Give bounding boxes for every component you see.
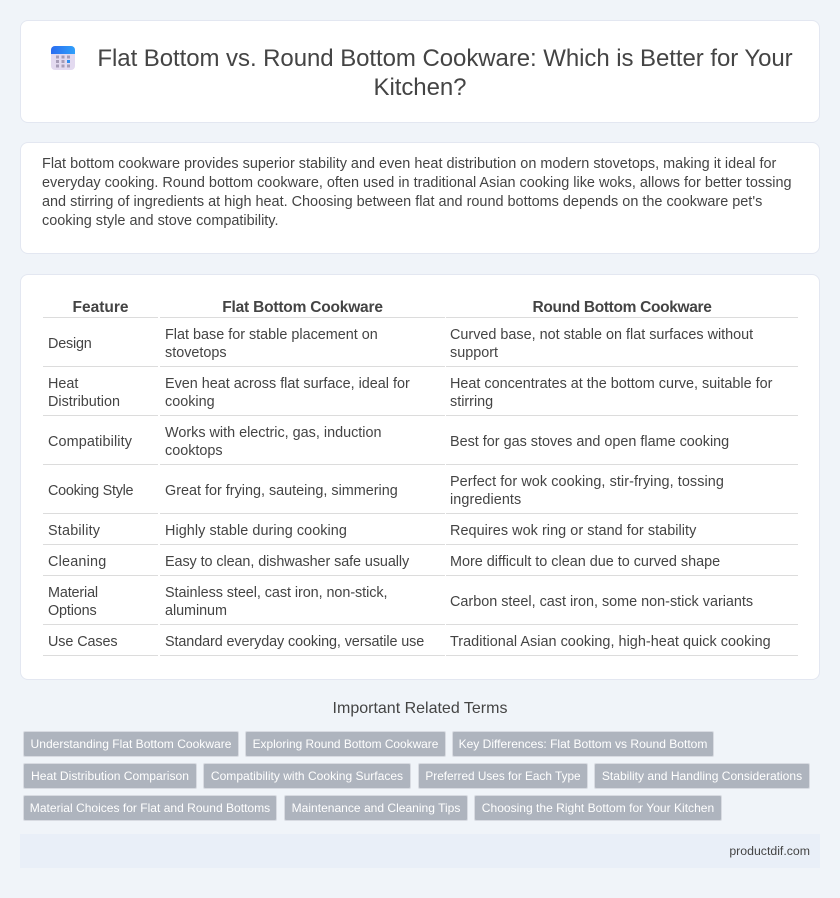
row: use cases: Standard everyday cooking, versatile use [165,634,424,650]
row: stability: Highly stable during cooking [165,523,347,539]
row: design: stovetops [165,345,227,361]
row: compatibility: Best for gas stoves and open flame cooking [450,434,729,450]
related term tags: Preferred Uses for Each Type [425,769,581,783]
row: compatibility: Compatibility [48,434,132,450]
row: design: Flat base for stable placement on [165,327,378,343]
row: cleaning: More difficult to clean due to curved shape [450,554,720,570]
row: stability: Stability [48,523,100,539]
row: compatibility [48,425,729,459]
row: cleaning: Cleaning [48,554,106,570]
table header: Round Bottom Cookware [532,299,712,316]
row: use cases: Use Cases [48,634,117,650]
row: material options: Stainless steel, cast iron, non-stick, [165,585,387,601]
related term tags: Material Choices for Flat and Round Bottoms [30,801,270,815]
row: compatibility: cooktops [165,443,223,459]
intro text: cooking style and stove compatibility. [42,213,278,229]
row: heat distribution: stirring [450,394,493,410]
row: cooking style: Great for frying, sauteing, simmering [165,483,398,499]
footer domain: productdif.com [729,844,810,858]
row: design: support [450,345,498,361]
row: cooking style: Cooking Style [48,483,133,499]
intro text: and stirring of ingredients at high heat. Choosing between flat and round bottoms depends on the cookware pet's [42,194,762,210]
row: heat distribution: cooking [165,394,215,410]
related term tags: Stability and Handling Considerations [602,769,802,783]
table header: Feature [72,299,128,316]
related term tags: Understanding Flat Bottom Cookware [31,737,231,751]
row: heat distribution: Distribution [48,394,120,410]
title: Kitchen? [374,74,466,101]
row: stability: Requires wok ring or stand for stability [450,523,696,539]
intro text: everyday cooking. Round bottom cookware, often used in traditional Asian cooking like woks, allows for better tossing [42,175,792,191]
row: stability [48,523,696,539]
row: use cases [48,634,771,650]
footer bar [20,834,820,868]
title [97,45,793,101]
related term tags: Exploring Round Bottom Cookware [253,737,438,751]
row: design [48,327,754,361]
row: material options: Material [48,585,98,601]
row: heat distribution [48,376,772,410]
related term tags: Choosing the Right Bottom for Your Kitchen [482,801,714,815]
table header: Flat Bottom Cookware [222,299,383,316]
row: cooking style [48,474,724,508]
panel: comparison table [20,274,820,680]
row: design: Design [48,336,92,352]
row: cleaning [48,554,720,570]
table header [72,299,712,316]
panel: introduction [20,142,820,254]
row: heat distribution: Heat [48,376,78,392]
icon: calendar [51,46,75,70]
intro text [42,156,792,229]
related term tags: Key Differences: Flat Bottom vs Round Bottom [459,737,707,751]
row: cooking style: Perfect for wok cooking, stir-frying, tossing [450,474,724,490]
row: material options: aluminum [165,603,227,619]
row: heat distribution: Even heat across flat surface, ideal for [165,376,410,392]
related term tags: Compatibility with Cooking Surfaces [211,769,403,783]
row: cooking style: ingredients [450,492,521,508]
row: cleaning: Easy to clean, dishwasher safe usually [165,554,409,570]
panel: title card [20,20,820,123]
related term tags: Heat Distribution Comparison [31,769,189,783]
row: heat distribution: Heat concentrates at the bottom curve, suitable for [450,376,772,392]
row: use cases: Traditional Asian cooking, high-heat quick cooking [450,634,771,650]
related term tags [23,731,810,821]
heading: related terms: Important Related Terms [333,700,507,717]
intro text: Flat bottom cookware provides superior stability and even heat distribution on modern stovetops, making it ideal for [42,156,776,172]
row: compatibility: Works with electric, gas, induction [165,425,381,441]
row: design: Curved base, not stable on flat surfaces without [450,327,753,343]
title: Flat Bottom vs. Round Bottom Cookware: Which is Better for Your [97,45,793,72]
row: material options: Options [48,603,97,619]
row: material options [48,585,753,619]
related term tags: Maintenance and Cleaning Tips [292,801,460,815]
row: material options: Carbon steel, cast iron, some non-stick variants [450,594,753,610]
